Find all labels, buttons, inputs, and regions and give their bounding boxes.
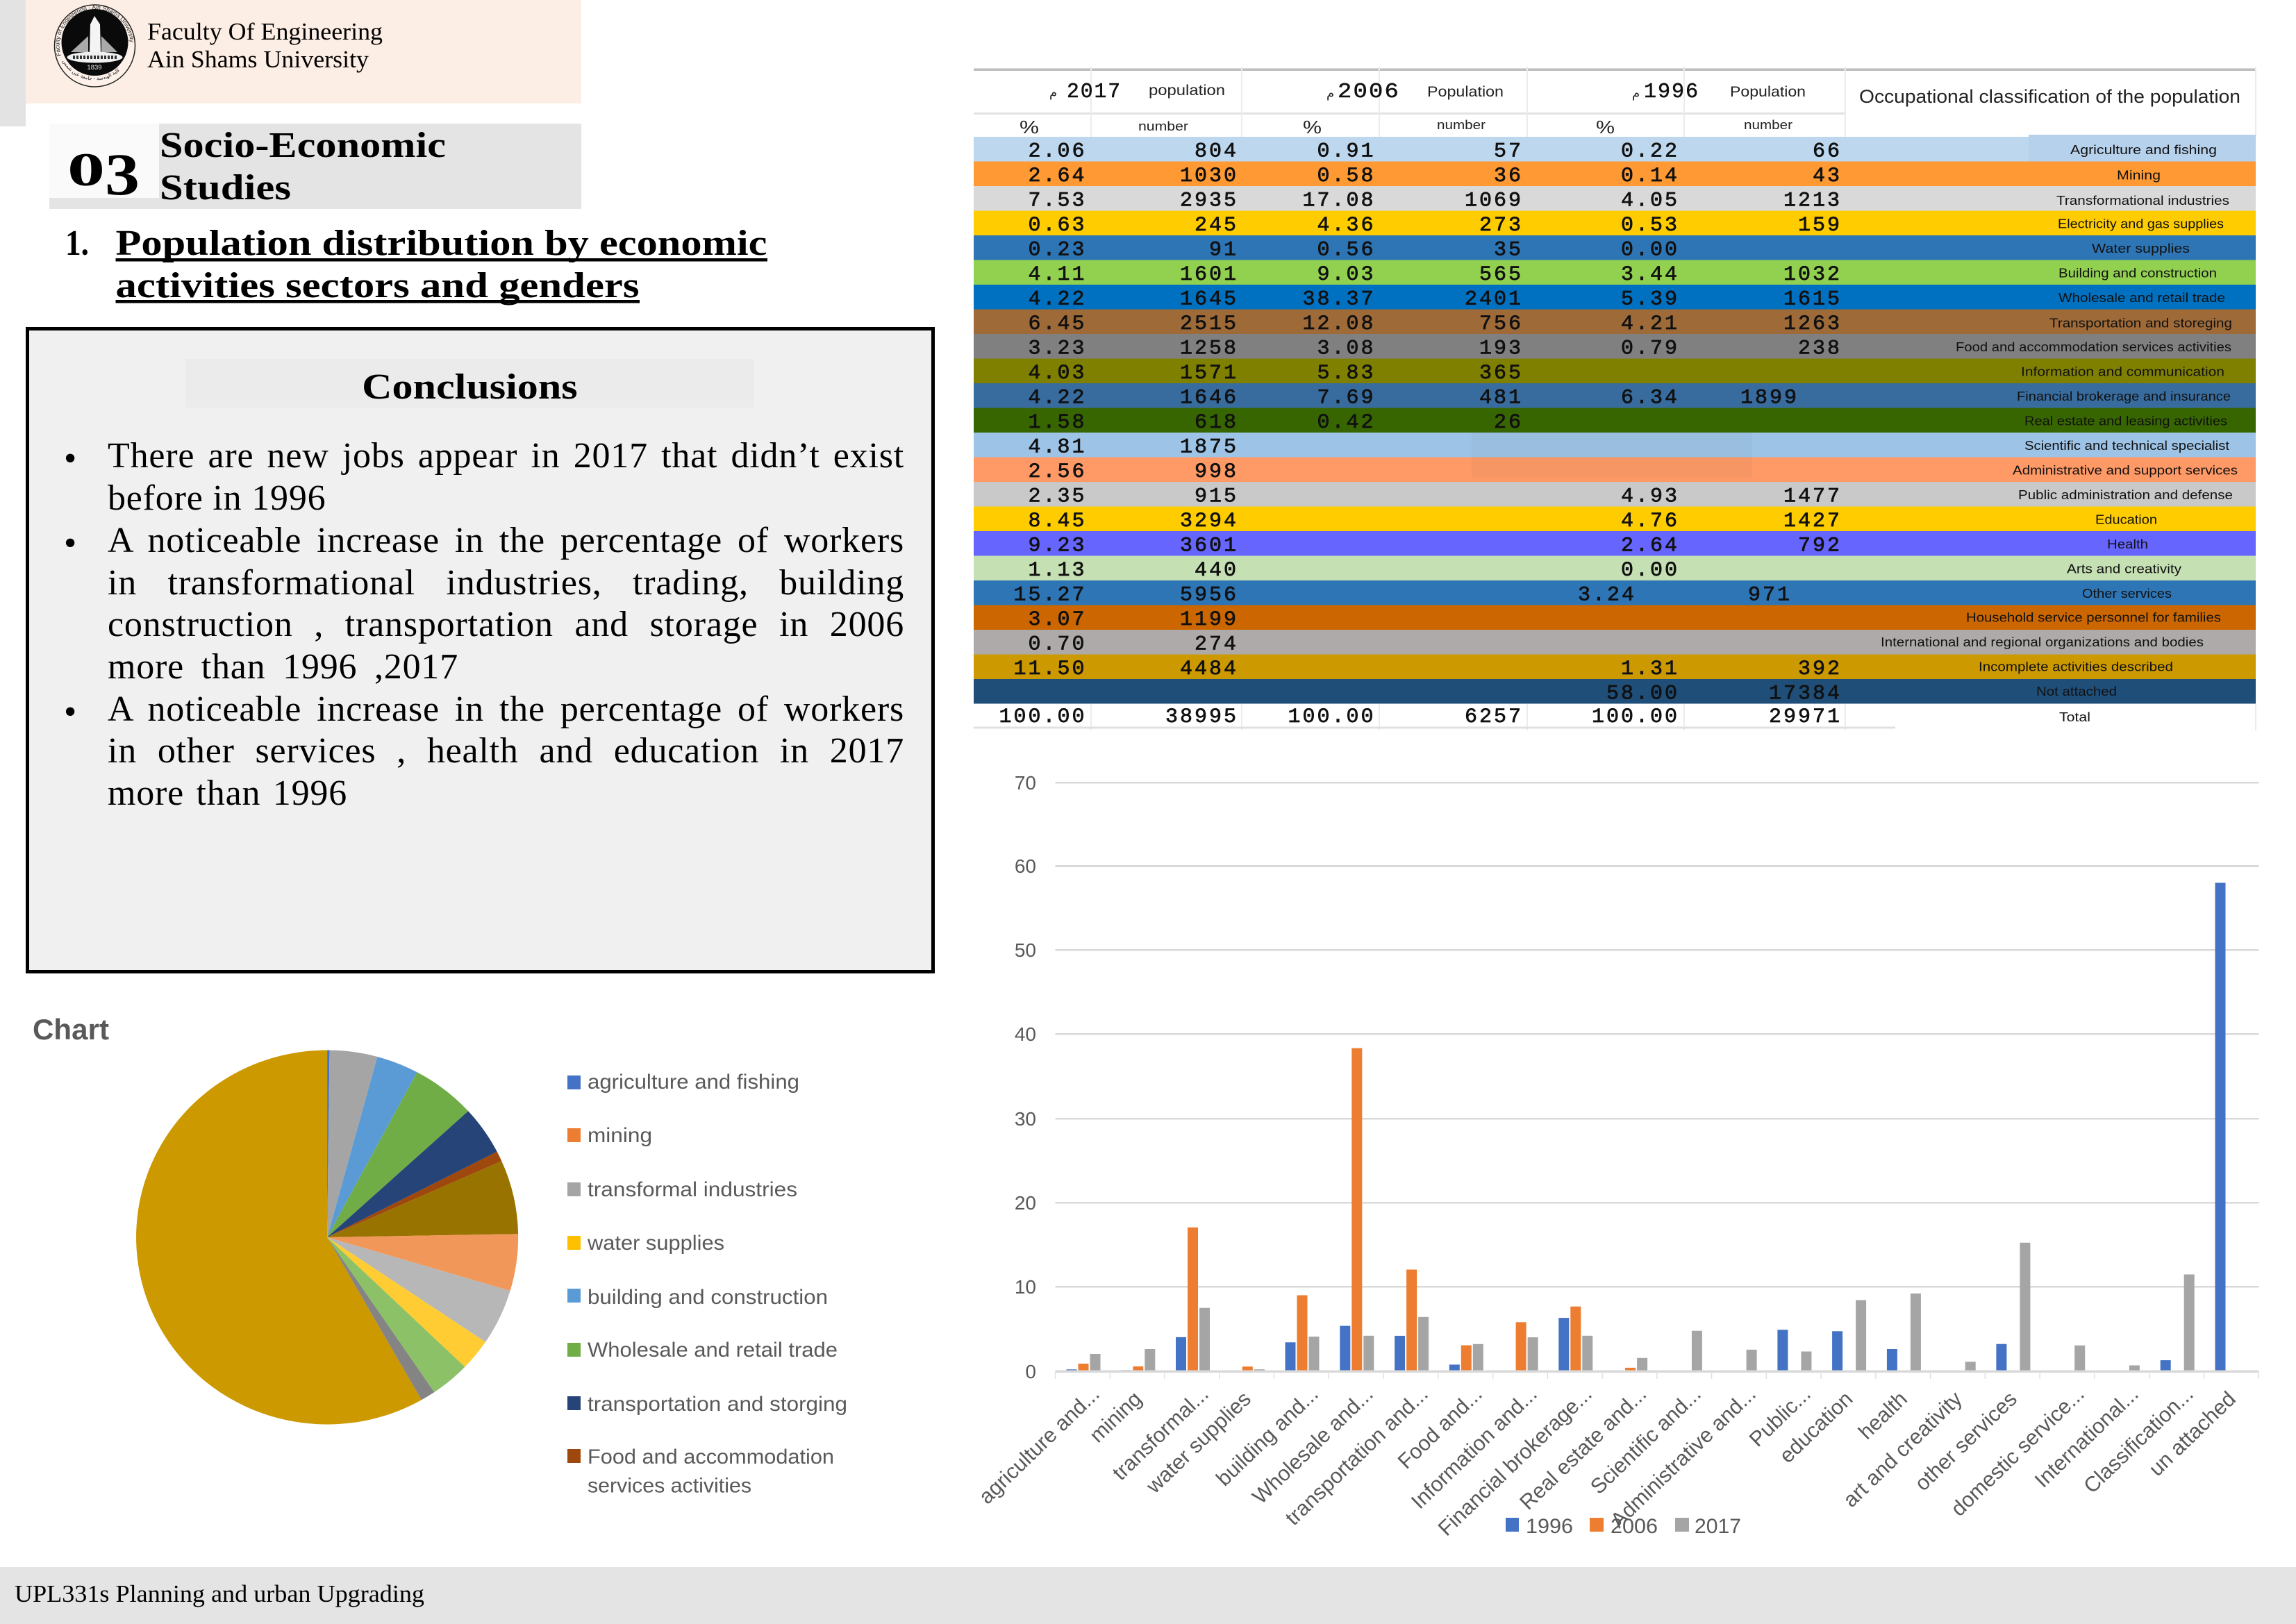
x axis category labels: mining (1085, 1387, 1147, 1447)
x axis category labels: Wholesale and... (1248, 1382, 1378, 1509)
row: not attached (974, 679, 2256, 705)
row: food and accommodation: 0.79 (1621, 337, 1679, 361)
row: agriculture and fishing: 2.06 (1028, 140, 1086, 164)
row: electricity and gas supplies: 159 (1798, 214, 1842, 237)
row: arts and creativity: 1.13 (1028, 559, 1086, 583)
x axis category labels: Information and... (1407, 1382, 1542, 1514)
conclusions heading: Conclusions (362, 367, 578, 407)
row: information and communication: 1571 (1180, 362, 1238, 385)
faculty name: Faculty Of Engineering (147, 18, 383, 45)
table header: م (1326, 86, 1334, 101)
row: wholesale and retail trade: 4.22 (1028, 287, 1086, 311)
x axis category labels: transformal... (1108, 1382, 1213, 1485)
row: not attached: Not attached (2036, 685, 2117, 698)
row: water supplies (974, 235, 2256, 262)
row: wholesale and retail trade: 1645 (1180, 287, 1238, 311)
row: incomplete activities: 1.31 (1621, 658, 1679, 681)
row: international organizations (974, 630, 2256, 657)
row: public administration and defense: Public administration and defense (2018, 488, 2233, 502)
row: other services: 971 (1748, 583, 1792, 607)
subtitle: population distribution: Population distribution by economic (115, 224, 767, 263)
y axis labels: 20 (1015, 1192, 1036, 1214)
table header: م (1632, 86, 1640, 101)
y axis labels: 10 (1015, 1276, 1036, 1298)
y axis labels: 60 (1015, 855, 1036, 877)
icon: university seal logo: Faculty of Engineering - Ain Shams University (56, 6, 133, 56)
row: wholesale and retail trade: Wholesale and retail trade (2058, 291, 2225, 305)
row: real estate and leasing: 618 (1195, 411, 1238, 435)
pie chart legend: services activities (588, 1475, 751, 1497)
table header: Occupational classification of the population (1859, 86, 2240, 107)
row: health: Health (2107, 537, 2148, 551)
row: education: 3294 (1180, 510, 1238, 533)
row: electricity and gas supplies: 245 (1195, 214, 1238, 237)
row: financial brokerage and insurance: 6.34 (1621, 386, 1679, 410)
row: international organizations: 274 (1195, 633, 1238, 657)
pie chart legend: transportation and storging (588, 1393, 847, 1416)
row: administrative and support: 998 (1195, 460, 1238, 484)
row: food and accommodation (974, 334, 2256, 361)
row: electricity and gas supplies (974, 211, 2256, 237)
row: international organizations: 0.70 (1028, 633, 1086, 657)
faculty name: Ain Shams University (147, 46, 369, 73)
row: financial brokerage and insurance: 1646 (1180, 386, 1238, 410)
row: transportation and storeging: 4.21 (1621, 312, 1679, 336)
row: mining: 1030 (1180, 165, 1238, 188)
row: transformational industries: 4.05 (1621, 189, 1679, 212)
row: building and construction: 9.03 (1317, 263, 1375, 287)
row: health: 2.64 (1621, 535, 1679, 558)
pie chart legend: Food and accommodation (588, 1446, 834, 1468)
row: agriculture and fishing: Agriculture and fishing (2070, 143, 2217, 157)
subtitle: population distribution: 1. (65, 224, 89, 263)
table header: number (1437, 118, 1486, 132)
row: health: 9.23 (1028, 535, 1086, 558)
row: agriculture and fishing: 0.22 (1621, 140, 1679, 164)
row: education: 4.76 (1621, 510, 1679, 533)
row: information and communication: Information and communication (2021, 365, 2224, 379)
row: transportation and storeging: 12.08 (1302, 312, 1375, 336)
row: transformational industries: 17.08 (1302, 189, 1375, 212)
row: agriculture and fishing: 57 (1494, 140, 1523, 164)
icon: university seal logo: كلية الهندسة - جامعة عين شمس (62, 61, 119, 81)
x axis category labels: Administrative and... (1606, 1382, 1761, 1532)
row: scientific and technical: 4.81 (1028, 436, 1086, 460)
pie chart legend: Wholesale and retail trade (588, 1339, 838, 1362)
row: electricity and gas supplies: 273 (1479, 214, 1523, 237)
pie chart legend: building and construction (588, 1286, 828, 1309)
row: real estate and leasing: 0.42 (1317, 411, 1375, 435)
row: incomplete activities: 11.50 (1013, 658, 1086, 681)
row: information and communication: 5.83 (1317, 362, 1375, 385)
icon: university seal logo: 1839 (87, 64, 102, 72)
row: food and accommodation: Food and accommodation services activities (1956, 340, 2231, 354)
row: transportation and storeging: 6.45 (1028, 312, 1086, 336)
pie chart legend: agriculture and fishing (588, 1071, 799, 1094)
row: financial brokerage and insurance: 1899 (1740, 386, 1799, 410)
panel: conclusions: construction , transportation and storage in 2006 (108, 605, 904, 644)
row: arts and creativity: 0.00 (1621, 559, 1679, 583)
bar chart legend: 2006 (1611, 1515, 1658, 1538)
row: total: 29971 (1769, 705, 1842, 729)
table header: population (1149, 83, 1225, 99)
row: real estate and leasing: 26 (1494, 411, 1523, 435)
row: water supplies: 35 (1494, 239, 1523, 262)
bullet 2 (64, 521, 904, 687)
row: mining: Mining (2117, 168, 2161, 182)
y axis labels: 30 (1015, 1108, 1036, 1130)
row: health: 792 (1798, 535, 1842, 558)
subtitle: population distribution: activities sectors and genders (115, 266, 639, 305)
section heading: 03 Socio-Economic Studies (49, 124, 581, 209)
x axis category labels: water supplies (1141, 1387, 1256, 1498)
row: electricity and gas supplies: 0.63 (1028, 214, 1086, 237)
x axis category labels: health (1854, 1387, 1912, 1444)
row: building and construction: 1032 (1783, 263, 1842, 287)
x axis category labels: education (1775, 1387, 1857, 1468)
row: health (974, 531, 2256, 558)
table header: 2006 (1338, 80, 1400, 104)
row: mining: 43 (1813, 165, 1842, 188)
section heading: 03 Socio-Economic Studies: Studies (160, 168, 291, 208)
row: other services (974, 580, 2256, 607)
row: household service personnel: 1199 (1180, 608, 1238, 632)
row: household service personnel: Household service personnel for families (1966, 611, 2221, 625)
row: agriculture and fishing (974, 135, 2256, 164)
row: transportation and storeging: Transportation and storeging (2049, 317, 2232, 330)
bars: 1996 series (1067, 883, 2225, 1371)
row: other services: 15.27 (1013, 583, 1086, 607)
row: other services: Other services (2082, 587, 2172, 601)
row: building and construction: 565 (1479, 263, 1523, 287)
row: water supplies: 0.00 (1621, 239, 1679, 262)
bar chart legend (1506, 1515, 1741, 1538)
data table: occupational classification (974, 67, 2256, 730)
row: public administration and defense (974, 482, 2256, 508)
table header: Population (1427, 84, 1504, 100)
row: agriculture and fishing: 0.91 (1317, 140, 1375, 164)
pie chart legend: mining (588, 1124, 652, 1147)
row: public administration and defense: 4.93 (1621, 485, 1679, 508)
chart title: Chart (33, 1013, 109, 1046)
footer bar (0, 1567, 2296, 1624)
row: building and construction: 3.44 (1621, 263, 1679, 287)
row: agriculture and fishing: 66 (1813, 140, 1842, 164)
panel: conclusions: in other services , health and education in 2017 (108, 731, 904, 771)
row: wholesale and retail trade: 5.39 (1621, 287, 1679, 311)
row: education: 1427 (1783, 510, 1842, 533)
x axis category labels: Real estate and... (1515, 1382, 1651, 1514)
row: food and accommodation: 1258 (1180, 337, 1238, 361)
x axis category labels: Food and... (1393, 1382, 1487, 1473)
table header: number (1138, 119, 1188, 133)
y axis labels: 40 (1015, 1023, 1036, 1045)
row: administrative and support (974, 457, 2256, 484)
y axis labels: 50 (1015, 939, 1036, 961)
row: total (974, 704, 2256, 730)
row: water supplies: 0.23 (1028, 239, 1086, 262)
row: transportation and storeging: 756 (1479, 312, 1523, 336)
panel: conclusions: • (64, 692, 76, 732)
x axis category labels: art and creativity (1838, 1387, 1967, 1512)
panel: conclusions: A noticeable increase in the percentage of workers (108, 689, 904, 729)
table header: Population (1730, 84, 1806, 100)
bar chart legend: 1996 (1526, 1515, 1573, 1538)
row: food and accommodation: 238 (1798, 337, 1842, 361)
row: information and communication (974, 358, 2256, 385)
x axis category labels: un attached (2145, 1387, 2240, 1481)
table header (974, 67, 2256, 137)
row: education (974, 507, 2256, 533)
conclusions heading (185, 359, 754, 408)
bar chart legend: 2017 (1695, 1515, 1741, 1538)
row: financial brokerage and insurance: 481 (1479, 386, 1523, 410)
panel: conclusions: • (64, 524, 76, 562)
row: information and communication: 365 (1479, 362, 1523, 385)
row: mining (974, 161, 2256, 188)
y axis labels: 70 (1015, 772, 1036, 794)
row: transformational industries (974, 186, 2256, 212)
row: transformational industries: 1213 (1783, 189, 1842, 212)
x axis category labels: Public... (1745, 1382, 1815, 1451)
row: financial brokerage and insurance: 4.22 (1028, 386, 1086, 410)
row: real estate and leasing: Real estate and leasing activities (2024, 414, 2227, 428)
section heading: 03 Socio-Economic Studies: 0 (67, 143, 105, 196)
table header: % (1303, 117, 1322, 137)
row: public administration and defense: 2.35 (1028, 485, 1086, 508)
panel: conclusions (26, 327, 935, 973)
row: transformational industries: 2935 (1180, 189, 1238, 212)
row: electricity and gas supplies: 0.53 (1621, 214, 1679, 237)
row: mining: 0.14 (1621, 165, 1679, 188)
pie chart legend (567, 1071, 847, 1497)
x axis category labels: other services (1911, 1387, 2022, 1496)
row: water supplies: 0.56 (1317, 239, 1375, 262)
row: other services: 5956 (1180, 583, 1238, 607)
x axis category labels: International... (2030, 1382, 2143, 1492)
row: total: 38995 (1165, 705, 1238, 729)
row: incomplete activities: Incomplete activities described (1979, 660, 2173, 673)
table header: % (1596, 117, 1615, 137)
y axis labels: 0 (1025, 1361, 1036, 1382)
subtitle: population distribution (65, 224, 767, 305)
icon: university seal logo (54, 4, 136, 87)
panel: conclusions: more than 1996 ,2017 (108, 647, 458, 687)
row: total: 100.00 (1288, 705, 1375, 729)
row: household service personnel (974, 605, 2256, 632)
panel: conclusions: more than 1996 (108, 773, 347, 813)
row: arts and creativity: Arts and creativity (2067, 562, 2181, 576)
row: education: 8.45 (1028, 510, 1086, 533)
pie chart (136, 1050, 518, 1425)
panel: conclusions: There are new jobs appear in 2017 that didn’t exist (108, 436, 904, 476)
row: total: 100.00 (999, 705, 1086, 729)
row: administrative and support: Administrative and support services (2013, 464, 2238, 478)
bullet 1 (64, 436, 904, 518)
row: total: 6257 (1465, 705, 1523, 729)
row: real estate and leasing: 1.58 (1028, 411, 1086, 435)
row: information and communication: 4.03 (1028, 362, 1086, 385)
row: building and construction (974, 260, 2256, 287)
row: incomplete activities: 4484 (1180, 658, 1238, 681)
pie chart legend: transformal industries (588, 1178, 797, 1201)
row: arts and creativity: 440 (1195, 559, 1238, 583)
row: incomplete activities (974, 654, 2256, 681)
row: administrative and support: 2.56 (1028, 460, 1086, 484)
x axis category labels: Classification... (2079, 1382, 2198, 1498)
row: wholesale and retail trade: 2401 (1465, 287, 1523, 311)
row: food and accommodation: 3.23 (1028, 337, 1086, 361)
x axis category labels: Scientific and... (1586, 1382, 1706, 1499)
row: other services: 3.24 (1578, 583, 1636, 607)
x axis category labels: building and... (1212, 1382, 1323, 1491)
row: household service personnel: 3.07 (1028, 608, 1086, 632)
row: transformational industries: 1069 (1465, 189, 1523, 212)
row: public administration and defense: 1477 (1783, 485, 1842, 508)
panel: conclusions: in transformational industries, trading, building (108, 563, 904, 603)
row: transformational industries: Transformational industries (2056, 194, 2229, 208)
row: electricity and gas supplies: Electricity and gas supplies (2058, 217, 2224, 231)
row: financial brokerage and insurance: 7.69 (1317, 386, 1375, 410)
row: food and accommodation: 3.08 (1317, 337, 1375, 361)
panel: conclusions: A noticeable increase in the percentage of workers (108, 521, 904, 560)
row: international organizations: International and regional organizations and bodies (1881, 635, 2204, 649)
row: real estate and leasing (974, 408, 2256, 435)
row: public administration and defense: 915 (1195, 485, 1238, 508)
row: scientific and technical: Scientific and technical specialist (2024, 439, 2229, 453)
row: building and construction: Building and construction (2058, 267, 2217, 281)
row: transportation and storeging: 1263 (1783, 312, 1842, 336)
section heading: 03 Socio-Economic Studies: 3 (105, 141, 140, 208)
table header: 1996 (1644, 80, 1699, 104)
faculty name (147, 18, 383, 73)
row: incomplete activities: 392 (1798, 658, 1842, 681)
table header: 2017 (1067, 80, 1122, 104)
bullet 3 (64, 689, 904, 813)
section heading: 03 Socio-Economic Studies: Socio-Economic (160, 126, 446, 165)
row: total: 100.00 (1592, 705, 1679, 729)
row: total: Total (2059, 710, 2090, 724)
x axis category labels: agriculture and... (974, 1382, 1104, 1509)
row: mining: 36 (1494, 165, 1523, 188)
row: wholesale and retail trade: 38.37 (1302, 287, 1375, 311)
row: scientific and technical: 1875 (1180, 436, 1238, 460)
pie chart legend: water supplies (587, 1232, 724, 1255)
row: mining: 2.64 (1028, 165, 1086, 188)
bar chart: workers percentage by sector (974, 772, 2258, 1541)
x axis category labels: Financial brokerage... (1433, 1382, 1597, 1541)
header: faculty banner (26, 0, 581, 103)
x axis category labels: transportation and... (1281, 1382, 1433, 1530)
row: transformational industries: 7.53 (1028, 189, 1086, 212)
bars: 2017 series (1090, 1243, 2195, 1371)
table header: م (1049, 85, 1057, 100)
row: not attached: 58.00 (1606, 682, 1679, 705)
row: transportation and storeging (974, 310, 2256, 336)
row: electricity and gas supplies: 4.36 (1317, 214, 1375, 237)
row: not attached: 17384 (1769, 682, 1842, 705)
row: agriculture and fishing: 804 (1195, 140, 1238, 164)
row: building and construction: 1601 (1180, 263, 1238, 287)
panel: conclusions: before in 1996 (108, 478, 326, 518)
footer bar: UPL331s Planning and urban Upgrading (15, 1580, 424, 1607)
row: transportation and storeging: 2515 (1180, 312, 1238, 336)
panel: conclusions: • (64, 439, 76, 478)
row: scientific and technical (974, 433, 2256, 460)
row: mining: 0.58 (1317, 165, 1375, 188)
row: food and accommodation: 193 (1479, 337, 1523, 361)
row: water supplies: 91 (1209, 239, 1238, 262)
table header: % (1020, 117, 1039, 137)
table header: number (1744, 118, 1792, 132)
row: health: 3601 (1180, 535, 1238, 558)
x axis category labels: domestic service... (1947, 1382, 2089, 1521)
bars: 2006 series (1078, 1048, 1636, 1371)
row: wholesale and retail trade (974, 285, 2256, 311)
x axis category labels (974, 1382, 2240, 1541)
row: financial brokerage and insurance (974, 383, 2256, 410)
row: wholesale and retail trade: 1615 (1783, 287, 1842, 311)
y axis labels (1015, 772, 1036, 1382)
row: education: Education (2095, 512, 2157, 526)
row: arts and creativity (974, 555, 2256, 583)
row: building and construction: 4.11 (1028, 263, 1086, 287)
row: water supplies: Water supplies (2092, 242, 2190, 256)
row: financial brokerage and insurance: Financial brokerage and insurance (2017, 390, 2231, 403)
